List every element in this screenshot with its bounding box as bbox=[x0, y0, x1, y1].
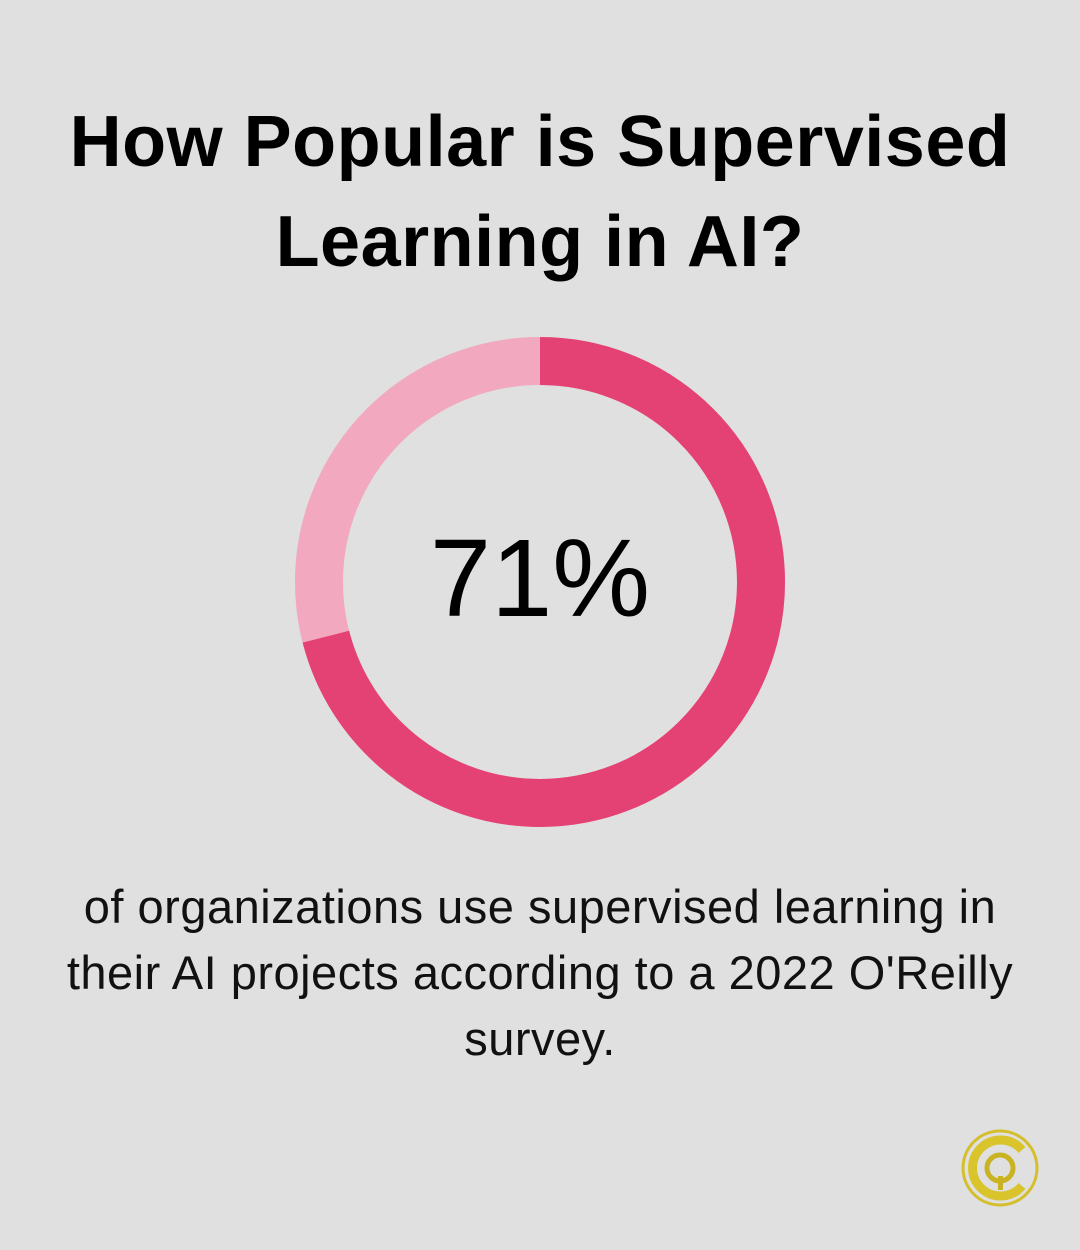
title bbox=[70, 102, 1010, 282]
title: Learning in AI? bbox=[276, 202, 804, 282]
description text: their AI projects according to a 2022 O'Reilly bbox=[67, 946, 1013, 999]
description text: of organizations use supervised learning in bbox=[84, 880, 996, 933]
donut chart: 71% bbox=[430, 517, 650, 640]
icon: logo bbox=[962, 1130, 1038, 1206]
title: How Popular is Supervised bbox=[70, 102, 1010, 182]
description text: survey. bbox=[464, 1012, 616, 1065]
description text bbox=[67, 880, 1013, 1065]
